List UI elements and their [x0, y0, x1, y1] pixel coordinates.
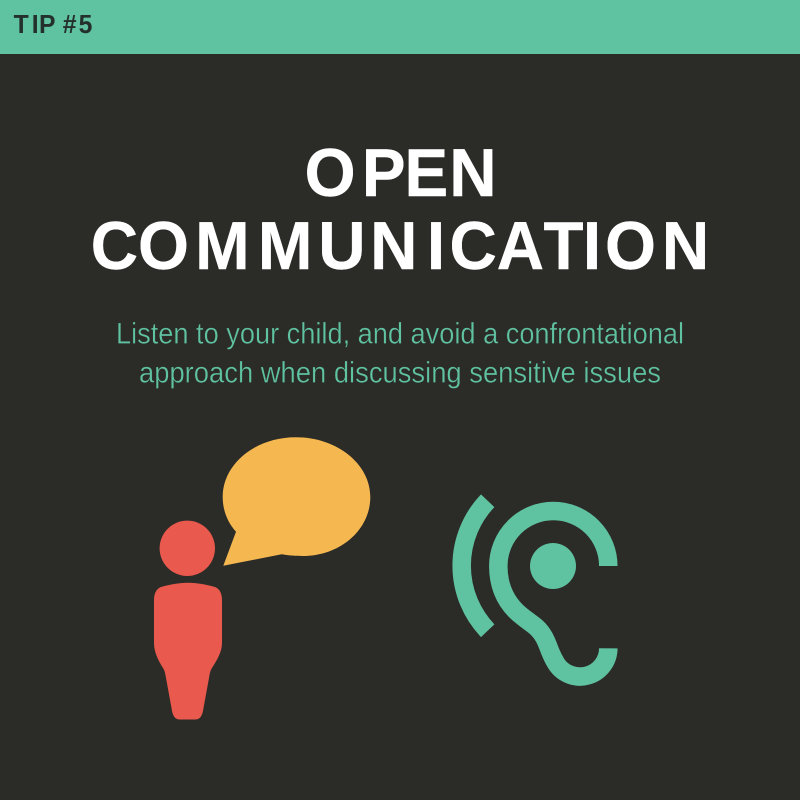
icon: ear with sound waves — [462, 501, 608, 677]
icon: person speaking — [154, 437, 370, 720]
person head — [160, 521, 215, 576]
subtitle text: Listen to your child, and avoid a confrontational — [116, 317, 684, 350]
sound wave arc — [462, 501, 488, 631]
person body — [154, 583, 222, 720]
subtitle text: approach when discussing sensitive issues — [139, 357, 661, 390]
tip number label: TIP #5 — [14, 10, 92, 39]
ear outline — [498, 511, 608, 677]
speech bubble — [223, 437, 370, 566]
subtitle text — [116, 317, 684, 390]
ear canal dot — [530, 543, 576, 589]
title — [91, 136, 709, 284]
title: COMMUNICATION — [91, 209, 709, 284]
title: OPEN — [305, 136, 496, 211]
header banner — [0, 0, 800, 54]
